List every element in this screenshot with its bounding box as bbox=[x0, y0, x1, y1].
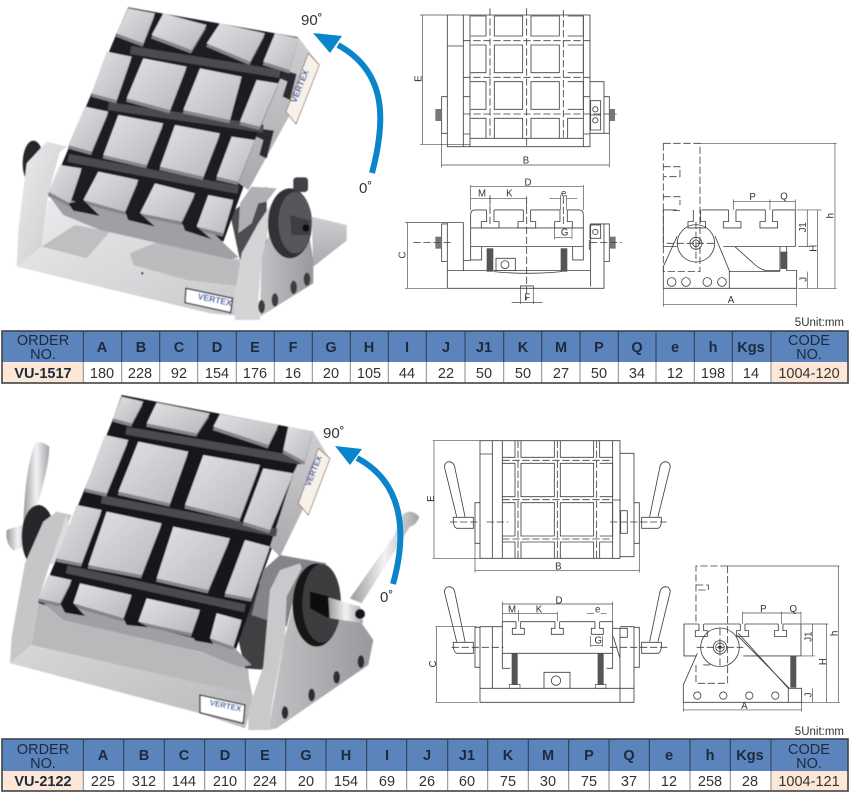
brand plate bbox=[185, 288, 233, 313]
table 2 header labels bbox=[17, 742, 830, 772]
table 2 header labels: e bbox=[665, 748, 673, 764]
table 1 values: 14 bbox=[743, 366, 759, 382]
product photo: VU-1517 tilting table bbox=[17, 7, 347, 320]
angle label 0: 0˚ bbox=[359, 180, 372, 197]
table 1 header labels: K bbox=[518, 340, 529, 356]
dimensions J1, H, J and h: J1 bbox=[798, 222, 809, 232]
dimension B bbox=[475, 543, 639, 573]
dimension e bbox=[549, 189, 577, 210]
dimensions J1, H, J and h: J1 bbox=[803, 632, 814, 642]
table 1 order number cell bbox=[2, 362, 83, 383]
dimension E bbox=[426, 441, 480, 558]
table 1 header labels: G bbox=[325, 340, 337, 356]
table 1 values: 50 bbox=[476, 366, 492, 382]
table 2 header labels: NO. bbox=[30, 756, 56, 772]
table 2 values: 210 bbox=[213, 774, 237, 790]
table tile shadows bbox=[48, 12, 298, 237]
dimension D bbox=[471, 177, 583, 210]
table 1 values: 50 bbox=[515, 366, 531, 382]
dimension A: A bbox=[728, 295, 735, 306]
table 1 values: 12 bbox=[667, 366, 683, 382]
table 2 order number cell bbox=[2, 771, 83, 791]
table 2 values: 28 bbox=[742, 774, 758, 790]
dimensions M and K bbox=[502, 604, 557, 622]
mounting holes bbox=[282, 655, 364, 719]
left handle bbox=[6, 442, 49, 551]
table 2 header labels: G bbox=[300, 748, 312, 764]
locking disc bbox=[268, 188, 312, 258]
table 1 values: 16 bbox=[285, 366, 301, 382]
table body bbox=[38, 395, 328, 667]
table 1 code number cell bbox=[771, 362, 848, 383]
table 1 values: 154 bbox=[205, 366, 229, 382]
table 1 header labels: e bbox=[671, 340, 679, 356]
unit note: table 1: 5Unit:mm bbox=[795, 317, 844, 329]
table tiles bbox=[38, 397, 313, 647]
right bracket end plate bbox=[268, 577, 373, 730]
product photo: VU-2122 tilting table with handles bbox=[6, 395, 419, 730]
rotation arrow 0 to 90 degrees bbox=[313, 33, 380, 173]
dimensions P and Q bbox=[733, 191, 795, 210]
table 1 values: 20 bbox=[323, 366, 339, 382]
table 1 header labels: F bbox=[289, 340, 298, 356]
horizontal table slots bbox=[68, 50, 280, 190]
base casting bbox=[17, 200, 248, 317]
dimensions P and Q: Q bbox=[790, 604, 798, 615]
rear base plate bbox=[312, 217, 347, 267]
dimension A: A bbox=[741, 701, 748, 712]
dimension e: e bbox=[561, 189, 566, 200]
table 1 values: VU-1517 bbox=[14, 366, 72, 382]
table body bbox=[48, 7, 318, 259]
dimension G bbox=[590, 635, 603, 647]
table 2 header labels: D bbox=[220, 748, 230, 764]
horizontal table slots bbox=[67, 431, 302, 608]
table 2 values: 30 bbox=[540, 774, 556, 790]
table 2 values: 75 bbox=[500, 774, 516, 790]
dimensions M and K: M bbox=[478, 189, 486, 200]
slot ends in front face bbox=[68, 200, 212, 239]
table 1 header labels: P bbox=[594, 340, 604, 356]
table 1 values: 92 bbox=[171, 366, 187, 382]
table 2 header labels: P bbox=[584, 748, 594, 764]
table 1 header labels: CODE bbox=[788, 333, 830, 349]
brand plate: VERTEX bbox=[197, 291, 233, 308]
table 1 header labels: J bbox=[442, 340, 450, 356]
table 2 values: 75 bbox=[581, 774, 597, 790]
table tile shadows bbox=[38, 400, 313, 650]
dimensions M and K: K bbox=[506, 189, 513, 200]
table tiles bbox=[48, 8, 298, 233]
table 1 header labels: J1 bbox=[476, 340, 492, 356]
table 2 header labels: B bbox=[139, 748, 149, 764]
dimensions J1, H, J and h: J bbox=[803, 692, 814, 697]
technical drawing: VU-2122 top view bbox=[426, 441, 670, 573]
base hollow shading bbox=[32, 602, 250, 693]
angle label 0: 0˚ bbox=[380, 589, 393, 606]
left bracket with end cap bbox=[17, 141, 67, 267]
dimension G: G bbox=[595, 635, 602, 646]
right cylinder bbox=[252, 555, 327, 627]
dimension C bbox=[398, 223, 447, 288]
table 1 header band bbox=[2, 331, 848, 362]
table 1 values: 50 bbox=[591, 366, 607, 382]
table 1 header labels bbox=[17, 333, 830, 363]
dimension B bbox=[442, 133, 609, 167]
table 1 header labels: ORDER bbox=[17, 333, 69, 349]
table 2 values: 225 bbox=[91, 774, 115, 790]
brand plate: VERTEX bbox=[209, 698, 243, 714]
table 1 values: 44 bbox=[399, 366, 415, 382]
table 2 header labels: Kgs bbox=[736, 748, 764, 764]
table 2 values: 37 bbox=[621, 774, 637, 790]
dimensions J1, H, J and h: H bbox=[808, 245, 819, 252]
table 2 values: VU-2122 bbox=[14, 774, 72, 790]
table 2 header labels: E bbox=[260, 748, 270, 764]
table 2 header labels: CODE bbox=[788, 742, 830, 758]
table 1 values: 22 bbox=[438, 366, 454, 382]
dimension F bbox=[512, 288, 543, 304]
table 1 values: 34 bbox=[629, 366, 645, 382]
dimension G bbox=[555, 227, 572, 239]
dimension D bbox=[502, 595, 613, 622]
angle label 90: 90˚ bbox=[323, 425, 345, 442]
table 2 header labels: K bbox=[503, 748, 514, 764]
side label bbox=[286, 53, 319, 124]
left hub disc bbox=[22, 505, 55, 568]
table 1 header labels: M bbox=[555, 340, 567, 356]
table 2 values: 60 bbox=[459, 774, 475, 790]
table 2 header labels: NO. bbox=[796, 756, 822, 772]
table 2 header labels: A bbox=[98, 748, 109, 764]
table 2 values: 154 bbox=[334, 774, 358, 790]
table 1 values bbox=[14, 366, 840, 382]
dimensions J1, H, J and h bbox=[700, 143, 837, 288]
technical drawing: VU-1517 top view bbox=[414, 8, 617, 167]
clamp collar bbox=[238, 187, 277, 233]
dimension D: D bbox=[555, 595, 562, 606]
table 2 values: 69 bbox=[379, 774, 395, 790]
dimension e bbox=[587, 604, 607, 615]
rotating handle right bbox=[350, 512, 419, 603]
dark recess behind the right end of the table bbox=[230, 187, 267, 263]
dimensions M and K: K bbox=[536, 604, 543, 615]
dimension E bbox=[414, 15, 470, 144]
locking knob bbox=[310, 592, 365, 623]
slot ends in front face bbox=[60, 603, 213, 644]
table 1 values: 176 bbox=[243, 366, 267, 382]
locking disc bbox=[293, 563, 341, 647]
locking knob bbox=[290, 177, 310, 235]
table 1 header labels: h bbox=[709, 340, 717, 356]
technical drawing: VU-2122 front view bbox=[428, 587, 670, 702]
table 1 values: 1004-120 bbox=[778, 366, 840, 382]
unit note: table 2: 5Unit:mm bbox=[795, 726, 844, 738]
left bracket bbox=[10, 512, 72, 663]
technical drawing: VU-2122 side view bbox=[683, 566, 840, 712]
dimension C: C bbox=[428, 660, 439, 667]
table 2 values: 312 bbox=[132, 774, 156, 790]
table 1 values: 228 bbox=[128, 366, 152, 382]
base hollow shading bbox=[42, 225, 242, 287]
dimension E: E bbox=[426, 495, 437, 502]
dimensions P and Q: P bbox=[760, 604, 767, 615]
base casting bbox=[10, 600, 253, 728]
table 2 header labels: H bbox=[341, 748, 351, 764]
dimension B: B bbox=[555, 561, 562, 572]
right bracket end plate bbox=[260, 200, 313, 317]
dimensions J1, H, J and h bbox=[728, 566, 840, 702]
table 1 header labels: A bbox=[97, 340, 108, 356]
dimension A bbox=[683, 701, 802, 712]
dimensions J1, H, J and h: h bbox=[829, 631, 840, 636]
table 2 values: 12 bbox=[661, 774, 677, 790]
table 2 header labels: I bbox=[385, 748, 389, 764]
table 2 header labels: M bbox=[542, 748, 554, 764]
table 1 values: 27 bbox=[553, 366, 569, 382]
table 1 header labels: NO. bbox=[30, 347, 56, 363]
table 2 code number cell bbox=[771, 771, 848, 791]
brand plate bbox=[200, 695, 245, 723]
table 1 values: 105 bbox=[357, 366, 381, 382]
dimensions J1, H, J and h: J bbox=[799, 277, 810, 282]
table 2 header labels: J bbox=[423, 748, 431, 764]
technical drawing: VU-1517 side view bbox=[663, 143, 837, 307]
dimensions P and Q bbox=[743, 604, 801, 624]
specification table: VU-2122 bbox=[2, 739, 848, 791]
table 1 values: 180 bbox=[90, 366, 114, 382]
right bracket strip bbox=[248, 563, 302, 730]
table 2 header band bbox=[2, 739, 848, 771]
table 2 header labels: ORDER bbox=[17, 742, 69, 758]
side label: VERTEX bbox=[289, 68, 311, 104]
technical drawing: VU-1517 front view bbox=[398, 177, 622, 304]
dimensions J1, H, J and h: h bbox=[825, 213, 836, 218]
table 2 values: 26 bbox=[419, 774, 435, 790]
rotation arrow 0 to 90 degrees bbox=[335, 446, 400, 584]
table 2 values: 1004-121 bbox=[778, 774, 840, 790]
dimension C: C bbox=[398, 251, 409, 258]
table 2 values: 144 bbox=[172, 774, 196, 790]
table 2 values: 258 bbox=[698, 774, 722, 790]
dimension C bbox=[428, 627, 478, 702]
angle label 90: 90˚ bbox=[301, 12, 323, 29]
dimensions M and K bbox=[471, 189, 527, 210]
side label: VERTEX bbox=[303, 454, 324, 487]
table 1 header labels: NO. bbox=[796, 347, 822, 363]
table 1 header labels: C bbox=[174, 340, 185, 356]
table 2 values bbox=[14, 774, 840, 790]
dimension F: F bbox=[524, 293, 530, 304]
dimension e: e bbox=[595, 604, 600, 615]
table 1 header labels: H bbox=[364, 340, 374, 356]
table 1 header labels: I bbox=[405, 340, 409, 356]
dark recess behind the right end of the table bbox=[230, 577, 270, 670]
dimension B: B bbox=[523, 156, 529, 167]
table 1 header labels: D bbox=[212, 340, 222, 356]
table 2 header labels: Q bbox=[623, 748, 635, 764]
table 1 values: 198 bbox=[701, 366, 725, 382]
table 2 values: 20 bbox=[298, 774, 314, 790]
dimensions M and K: M bbox=[508, 604, 516, 615]
dimensions P and Q: P bbox=[749, 192, 756, 203]
table 2 header labels: J1 bbox=[459, 748, 475, 764]
dimension A bbox=[663, 288, 797, 307]
table 1 header labels: Kgs bbox=[737, 340, 765, 356]
table 1 header labels: B bbox=[136, 340, 146, 356]
dimensions P and Q: Q bbox=[780, 191, 788, 202]
table 2 values: 224 bbox=[253, 774, 277, 790]
side label bbox=[298, 448, 330, 515]
table 1 header labels: E bbox=[250, 340, 260, 356]
table 1 header labels: Q bbox=[631, 340, 643, 356]
table 2 header labels: C bbox=[179, 748, 190, 764]
specification table: VU-1517 bbox=[2, 331, 848, 383]
dimensions J1, H, J and h: H bbox=[818, 658, 829, 665]
mounting holes bbox=[258, 273, 310, 313]
table 2 header labels: h bbox=[706, 748, 714, 764]
dimension D: D bbox=[524, 177, 531, 188]
left cylinder bbox=[50, 515, 75, 567]
dimension E: E bbox=[414, 75, 425, 82]
right bracket strip bbox=[235, 190, 283, 320]
dimension G: G bbox=[561, 227, 568, 238]
